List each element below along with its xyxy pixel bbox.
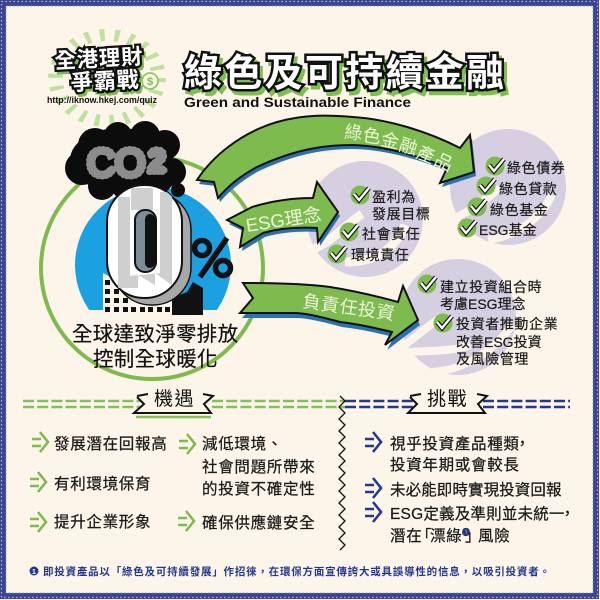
icon: check [340, 222, 358, 242]
item: ESG定義及準則並未統一， [390, 505, 575, 523]
heading: opportunities [134, 388, 213, 417]
logo heading: 全港理財 [56, 48, 145, 76]
footnote marker: 1 [32, 569, 36, 576]
item: loans: 綠色貸款 [499, 181, 557, 197]
logo sunburst rays [55, 35, 159, 121]
logo heading: 全港理財 [54, 45, 143, 73]
list: green products [458, 156, 565, 238]
icon: check [486, 156, 504, 176]
icon: arrow [178, 511, 194, 531]
item: portfolio: 考慮ESG理念 [440, 296, 526, 312]
big zero [107, 185, 191, 305]
icon: dollar bulb: $ [147, 76, 153, 88]
divider lines [23, 401, 570, 407]
list: opportunities [30, 432, 315, 532]
icon: check [476, 176, 496, 196]
item: 」 [465, 528, 481, 545]
item: social: 社會責任 [362, 226, 420, 242]
icon: right black building [172, 282, 203, 315]
item: 視乎投資產品種類， [390, 435, 531, 453]
item: 有利環境保育 [54, 474, 151, 493]
arrow: ESG concept [227, 182, 340, 251]
heading: challenges: 挑戰 [427, 388, 468, 410]
panel: ESG purple blob [307, 161, 423, 277]
icon: check [458, 218, 476, 238]
title: 綠色及可持續金融 [184, 53, 506, 95]
arrow label: 負責任投資 [301, 291, 396, 324]
item: ❶ [462, 528, 471, 537]
list: responsible investing [418, 274, 558, 367]
icon: arrow [365, 502, 381, 522]
circle caption: 全球達致淨零排放 [72, 323, 238, 346]
footnote text: 即投資產品以「綠色及可持續發展」作招徠，在環保方面宣傳誇大或具誤導性的信息，以吸引投資者。 [43, 565, 550, 578]
icon: check [468, 198, 486, 216]
CO2 label: 2 [148, 143, 166, 179]
item: portfolio [440, 279, 542, 312]
logo heading: 爭霸戰 [72, 70, 141, 98]
icon: left building [103, 273, 172, 312]
CO2 label: O [115, 142, 145, 185]
footnote [30, 565, 550, 578]
percent sign [194, 238, 230, 277]
icon: check [434, 314, 452, 332]
item: profit [372, 189, 430, 222]
item: 社會問題所帶來 [202, 458, 315, 476]
icon: arrow [30, 472, 46, 492]
panel: net zero circle [41, 121, 263, 379]
subtitle: Green and Sustainable Finance [184, 94, 411, 110]
item: 「 [416, 527, 432, 545]
green ring [41, 157, 263, 379]
panel: products purple blob [450, 129, 566, 245]
item: portfolio: 建立投資組合時 [440, 279, 542, 295]
item: engagement [456, 316, 558, 367]
arrow label: 綠色金融產品 [344, 122, 456, 175]
item: 未必能即時實現投資回報 [390, 480, 562, 499]
CO2 label: C [87, 142, 115, 185]
icon: check [418, 274, 436, 294]
item: engagement: 及風險管理 [456, 351, 529, 367]
item: ESG funds: ESG基金 [479, 222, 537, 238]
logo heading: 爭霸戰 [70, 67, 139, 96]
item: 潛在 [390, 527, 422, 545]
item: 發展潛在回報高 [54, 435, 167, 453]
item: profit: 盈利為 [372, 189, 416, 205]
item [390, 505, 575, 545]
circle caption [72, 323, 238, 371]
item: engagement: 投資者推動企業 [456, 316, 558, 332]
heading: challenges [408, 388, 487, 413]
circle caption: 控制全球暖化 [93, 348, 218, 371]
item: engagement: 改善ESG投資 [456, 334, 542, 350]
icon: arrow [30, 512, 46, 532]
icon: arrow [32, 432, 48, 452]
blue sky circle [75, 188, 231, 310]
arrow label: ESG理念 [244, 203, 323, 236]
item: 減低環境、 [202, 434, 283, 453]
arrow: responsible investing [240, 283, 420, 350]
icon: arrow [179, 434, 195, 454]
logo url: http://iknow.hkej.com/quiz [47, 95, 157, 105]
icon: smoke cloud [65, 121, 186, 202]
list: ESG concept items [328, 186, 430, 264]
icon: check [350, 186, 370, 204]
icon: check [328, 244, 346, 264]
zigzag divider [339, 396, 345, 550]
item: 確保供應鏈安全 [202, 513, 315, 532]
icon: arrow [365, 478, 381, 498]
panel: responsible purple blob [400, 259, 516, 375]
item [202, 434, 315, 498]
heading: opportunities: 機遇 [154, 388, 195, 410]
item: 投資年期或會較長 [390, 456, 520, 474]
item: bonds: 綠色債券 [507, 160, 565, 176]
title: 綠色及可持續金融 [187, 57, 509, 99]
footnote marker [30, 566, 38, 576]
item: 風險 [478, 527, 510, 545]
arrow: green finance products [197, 116, 476, 202]
item: environment: 環境責任 [351, 247, 409, 263]
list: challenges [365, 432, 575, 545]
icon: arrow [365, 432, 381, 452]
item: 提升企業形象 [54, 513, 151, 531]
item: 漂綠 [430, 527, 462, 545]
item: funds: 綠色基金 [490, 202, 548, 218]
item: profit: 發展目標 [372, 206, 430, 222]
logo heading [54, 45, 146, 99]
item: 的投資不確定性 [202, 480, 315, 498]
quiz logo [47, 35, 159, 121]
item [390, 435, 531, 474]
